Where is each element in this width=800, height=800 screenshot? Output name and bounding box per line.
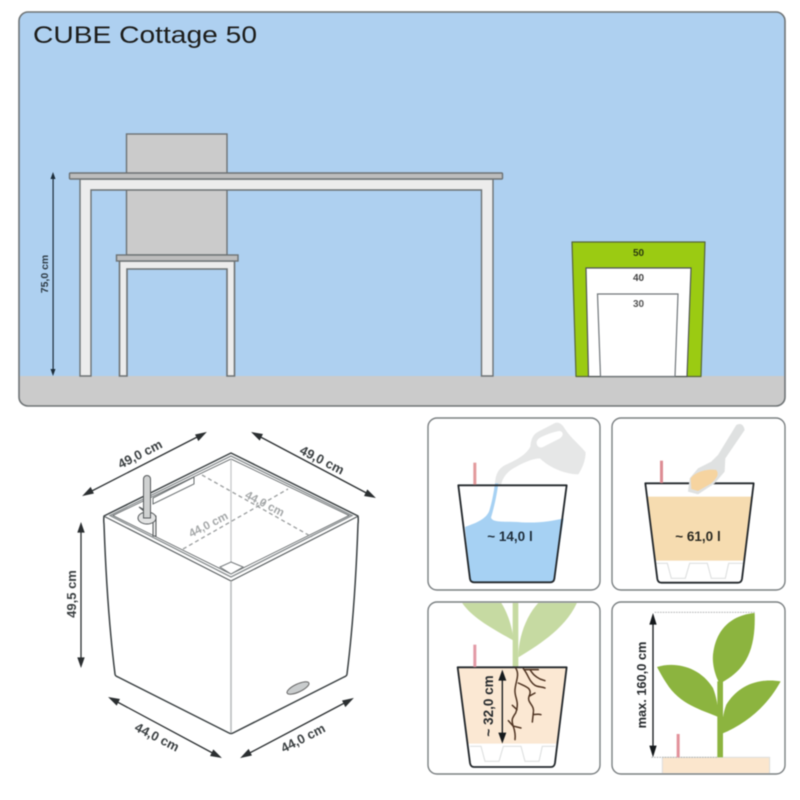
depth arrow [498,670,506,744]
green plant [657,613,781,757]
inner dimension labels [187,489,286,540]
panel: root depth [428,600,600,774]
outer dimension labels: 44,0 cm [278,720,328,756]
back corner line [230,459,232,562]
planter size 40 [586,268,691,376]
height arrow: table [50,172,56,376]
panel: water reservoir [428,418,600,590]
inner dimension labels: 44,0 cm [187,510,230,540]
outer dimension labels [64,436,347,756]
indicator stick [677,734,680,757]
watering can [495,423,586,485]
water level indicator [138,476,156,536]
inner dimension: width [183,475,312,549]
planter dimension drawing [64,433,374,757]
pot with roots [458,645,567,767]
planter size 50 [572,242,705,376]
pale plant [460,600,578,668]
trowel with substrate [688,424,745,494]
panel: maximum plant height [612,602,785,777]
volume label: substrate: ~ 61,0 l [675,529,721,544]
pot with substrate [645,424,754,583]
fill slot [153,477,194,504]
pot with water [458,463,567,582]
substrate block [662,756,770,774]
panel: substrate volume [612,418,785,590]
panel border [19,12,785,406]
size labels [633,248,644,310]
title: CUBE Cottage 50 [33,22,257,49]
measurement guide lines [651,612,755,757]
height label: max. 160,0 cm [634,642,649,728]
chair [116,134,238,376]
table [70,173,502,376]
height label: table: 75,0 cm [39,255,51,293]
planter size 30 [598,294,678,376]
outer dimension labels: 49,0 cm [115,436,165,472]
depth label: ~ 32,0 cm [481,675,496,737]
roots [508,668,545,740]
size labels: 50 [633,248,644,259]
outer dimension labels: 49,5 cm [64,570,79,618]
inner dimension labels: 44,0 cm [243,489,286,519]
volume label: water: ~ 14,0 l [487,529,533,544]
height arrow [649,613,657,757]
size labels: 40 [633,273,644,284]
planter rim [104,456,358,581]
floor [19,376,785,406]
outer dimension arrows [78,433,374,757]
planter size comparison [572,242,705,376]
front corner line [230,581,232,733]
outer dimension labels: 49,0 cm [297,442,347,478]
inner corner plate [220,562,243,574]
size labels: 30 [633,299,644,310]
panel: size comparison scene [19,12,785,406]
outer dimension labels: 44,0 cm [132,719,182,755]
brand badge [285,679,311,697]
planter body [104,453,358,734]
